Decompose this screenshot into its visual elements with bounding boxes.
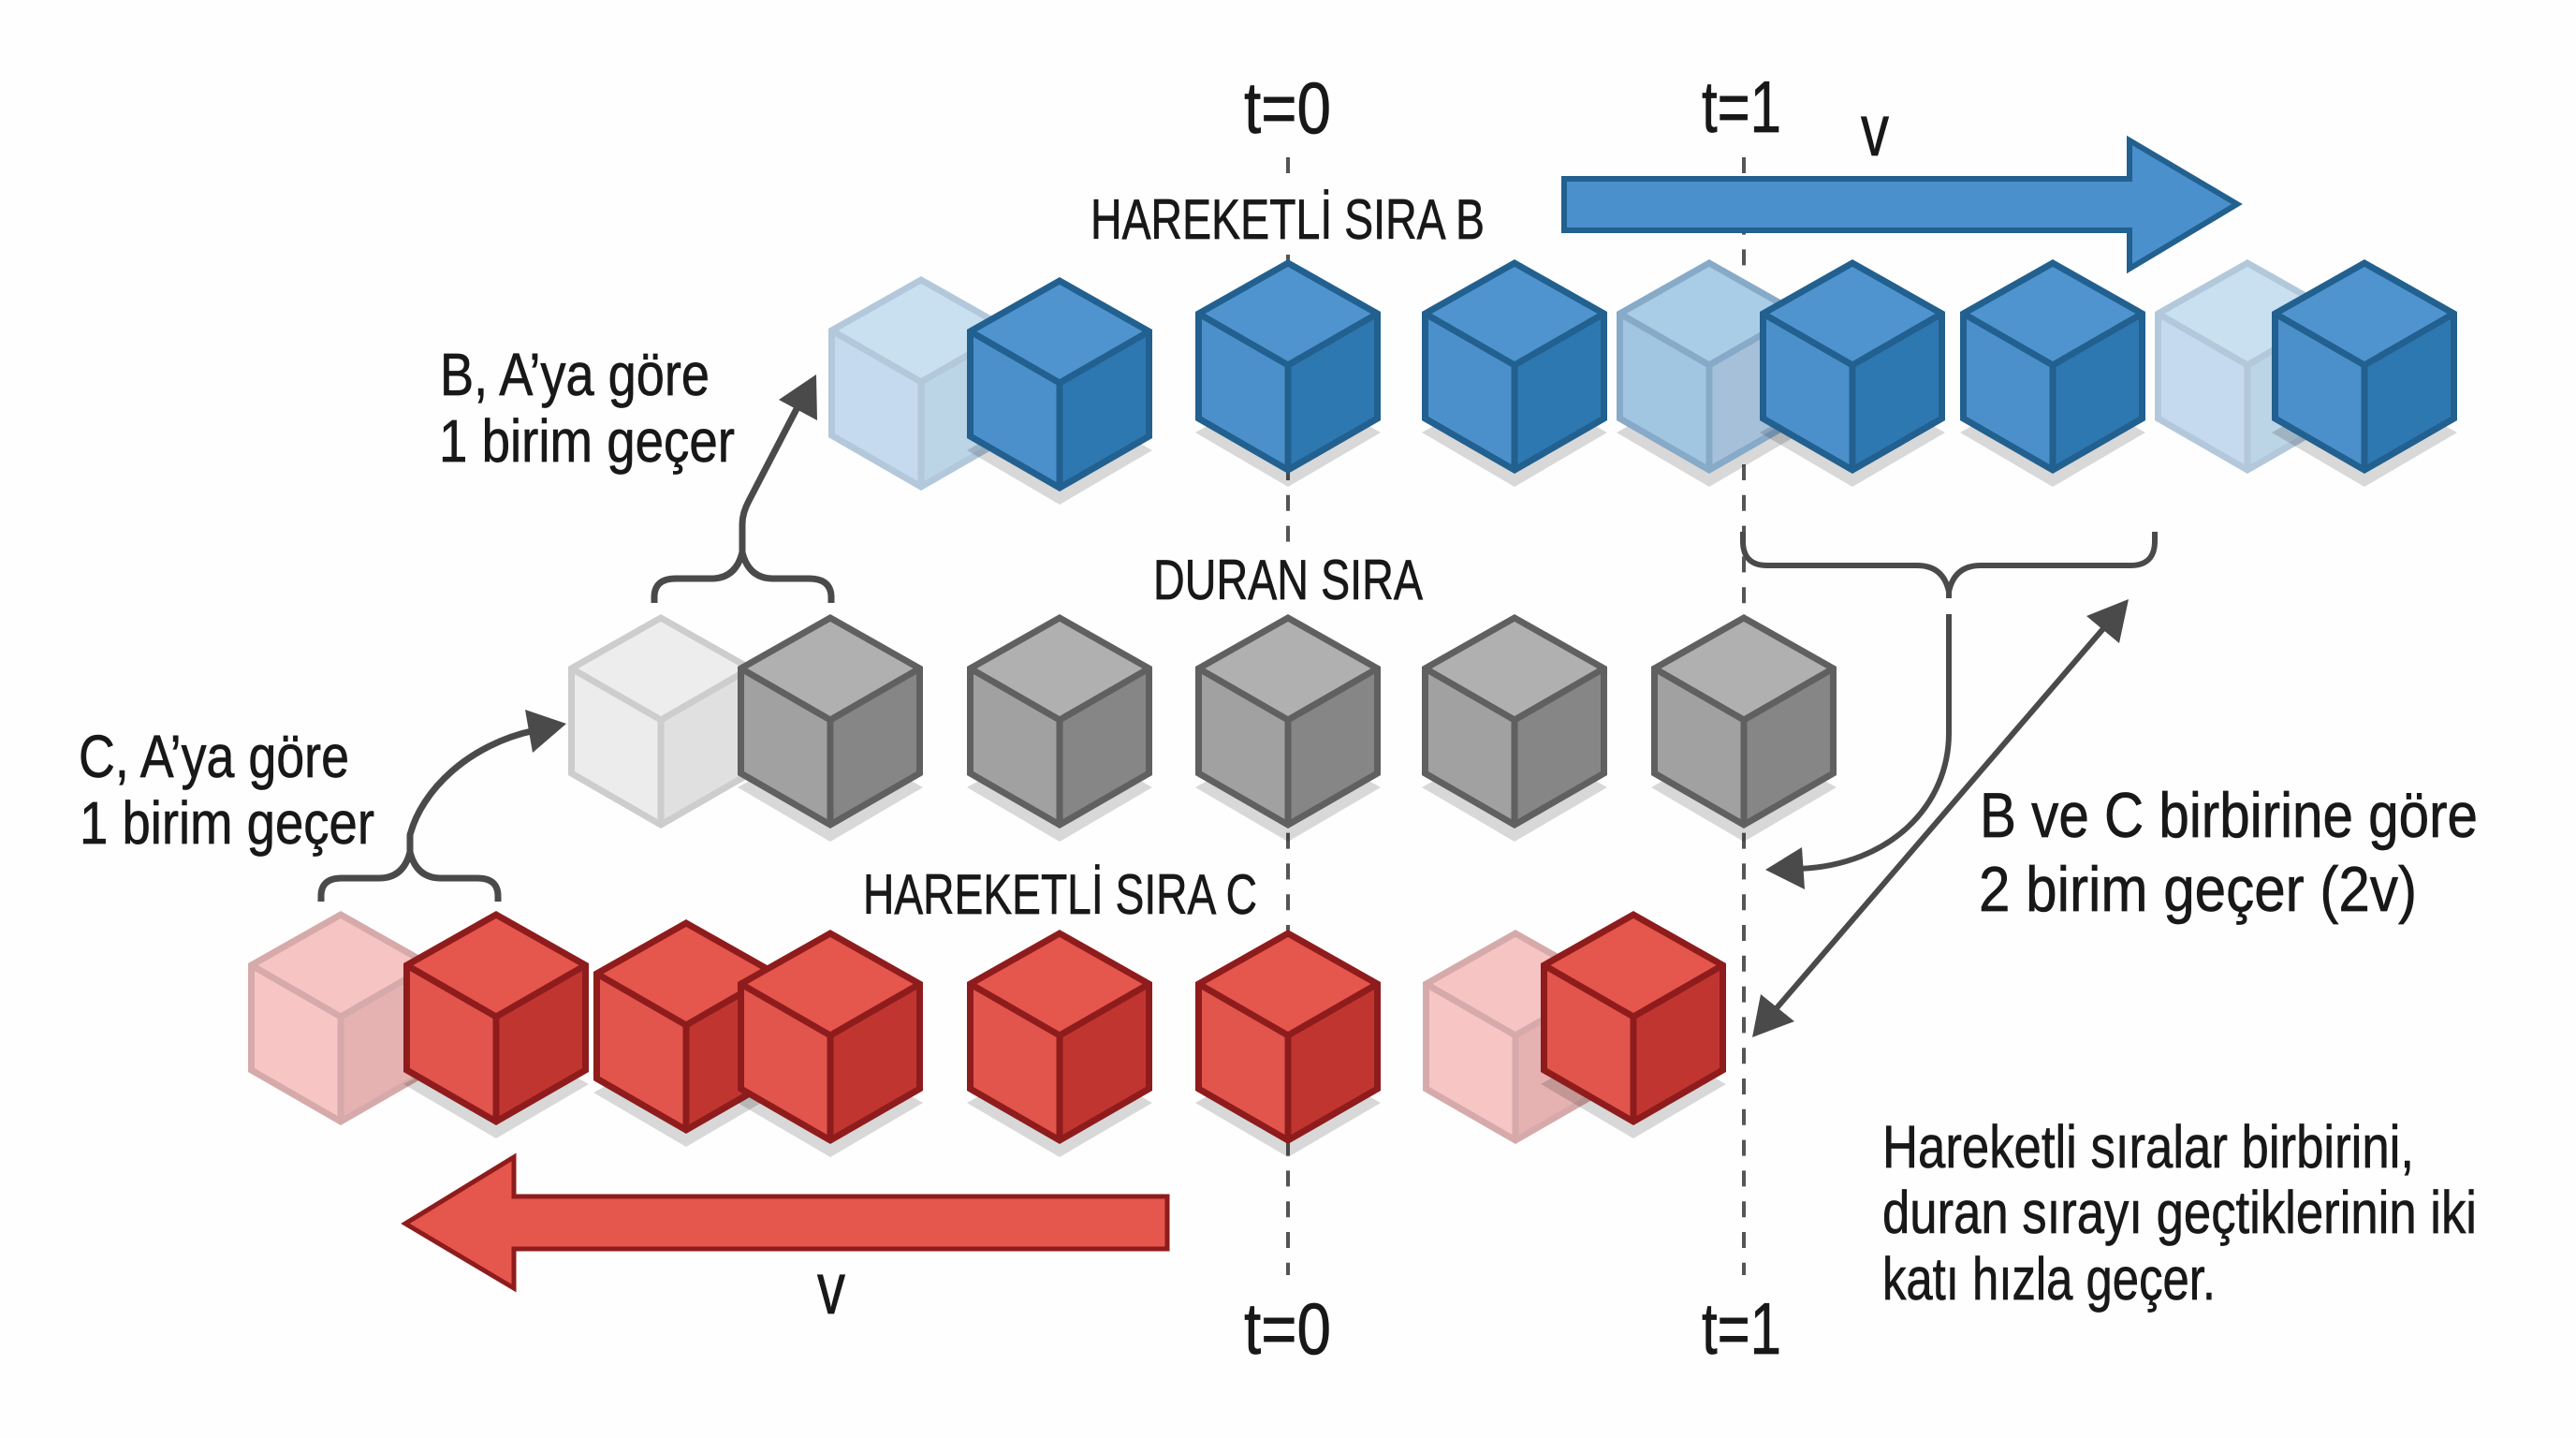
heading: moving row C: HAREKETLİ SIRA C (863, 863, 1257, 926)
cube A3 (1195, 618, 1381, 842)
cube A2 (967, 618, 1152, 842)
ghost cube C6 (1427, 933, 1604, 1140)
cube B1 (967, 281, 1152, 505)
text: C passes A: 1 birim geçer (80, 789, 374, 857)
cube C5 (1195, 933, 1381, 1157)
heading: moving row B: HAREKETLİ SIRA B (1090, 188, 1485, 251)
arrow: red velocity left (405, 1157, 1167, 1288)
annotation: B and C brace and curved arrow (1743, 532, 2155, 889)
cube C1 (403, 915, 589, 1138)
cube A5 (1651, 618, 1837, 842)
row: stationary row A (571, 618, 1837, 842)
annotation: B passes A, brace and arrow (654, 374, 831, 603)
cube B6 (2272, 263, 2457, 487)
cube B5 (1960, 263, 2145, 487)
cube C3 (738, 933, 923, 1157)
text: C passes A (79, 723, 374, 857)
arrow: double-headed between B and C (1752, 599, 2129, 1037)
row: moving row C (251, 915, 1726, 1157)
cube B4 (1760, 263, 1945, 487)
text: B and C pass each other: B ve C birbirine göre (1980, 780, 2478, 851)
dashed time line t=1 (1742, 157, 1746, 1275)
ghost cube B4 (1617, 263, 1802, 487)
cube A4 (1422, 618, 1607, 842)
label: t=1 bottom: t=1 (1702, 1287, 1781, 1370)
text: B passes A: 1 birim geçer (439, 407, 735, 475)
ghost cube C1 (251, 915, 431, 1122)
heading backing for moving row B (1086, 174, 1490, 255)
text: B passes A (439, 341, 735, 475)
cube C4 (967, 933, 1152, 1157)
text: B and C pass each other (1979, 780, 2478, 925)
ghost cube B1 (831, 280, 1011, 487)
text: conclusion note: katı hızla geçer. (1882, 1245, 2216, 1313)
label: t=0 bottom: t=0 (1244, 1287, 1331, 1370)
cube C6 (1541, 915, 1726, 1138)
annotation: C passes A, brace and arrow (321, 710, 566, 902)
text: C passes A: C, A’ya göre (79, 723, 349, 790)
heading backing for stationary row (1148, 552, 1430, 610)
arrow: blue velocity right (1564, 140, 2237, 269)
heading: stationary row: DURAN SIRA (1153, 549, 1423, 611)
text: B and C pass each other: 2 birim geçer (2v) (1979, 854, 2417, 925)
row: moving row B (831, 263, 2457, 505)
cube A1 (738, 618, 923, 842)
label: v blue: v (1861, 89, 1889, 171)
ghost cube B6 (2159, 263, 2336, 470)
cube B2 (1195, 263, 1381, 487)
text: B passes A: B, A’ya göre (440, 341, 710, 408)
text: conclusion note (1882, 1113, 2477, 1313)
dashed time line t=0 (1286, 157, 1290, 1275)
ghost cube A1 (571, 618, 751, 825)
cube C2 (593, 923, 779, 1147)
label: t=0 top: t=0 (1244, 66, 1331, 149)
text: conclusion note: Hareketli sıralar birbirini, (1882, 1113, 2414, 1181)
label: v red: v (817, 1247, 845, 1329)
cube B3 (1422, 263, 1607, 487)
label: t=1 top: t=1 (1702, 66, 1781, 148)
